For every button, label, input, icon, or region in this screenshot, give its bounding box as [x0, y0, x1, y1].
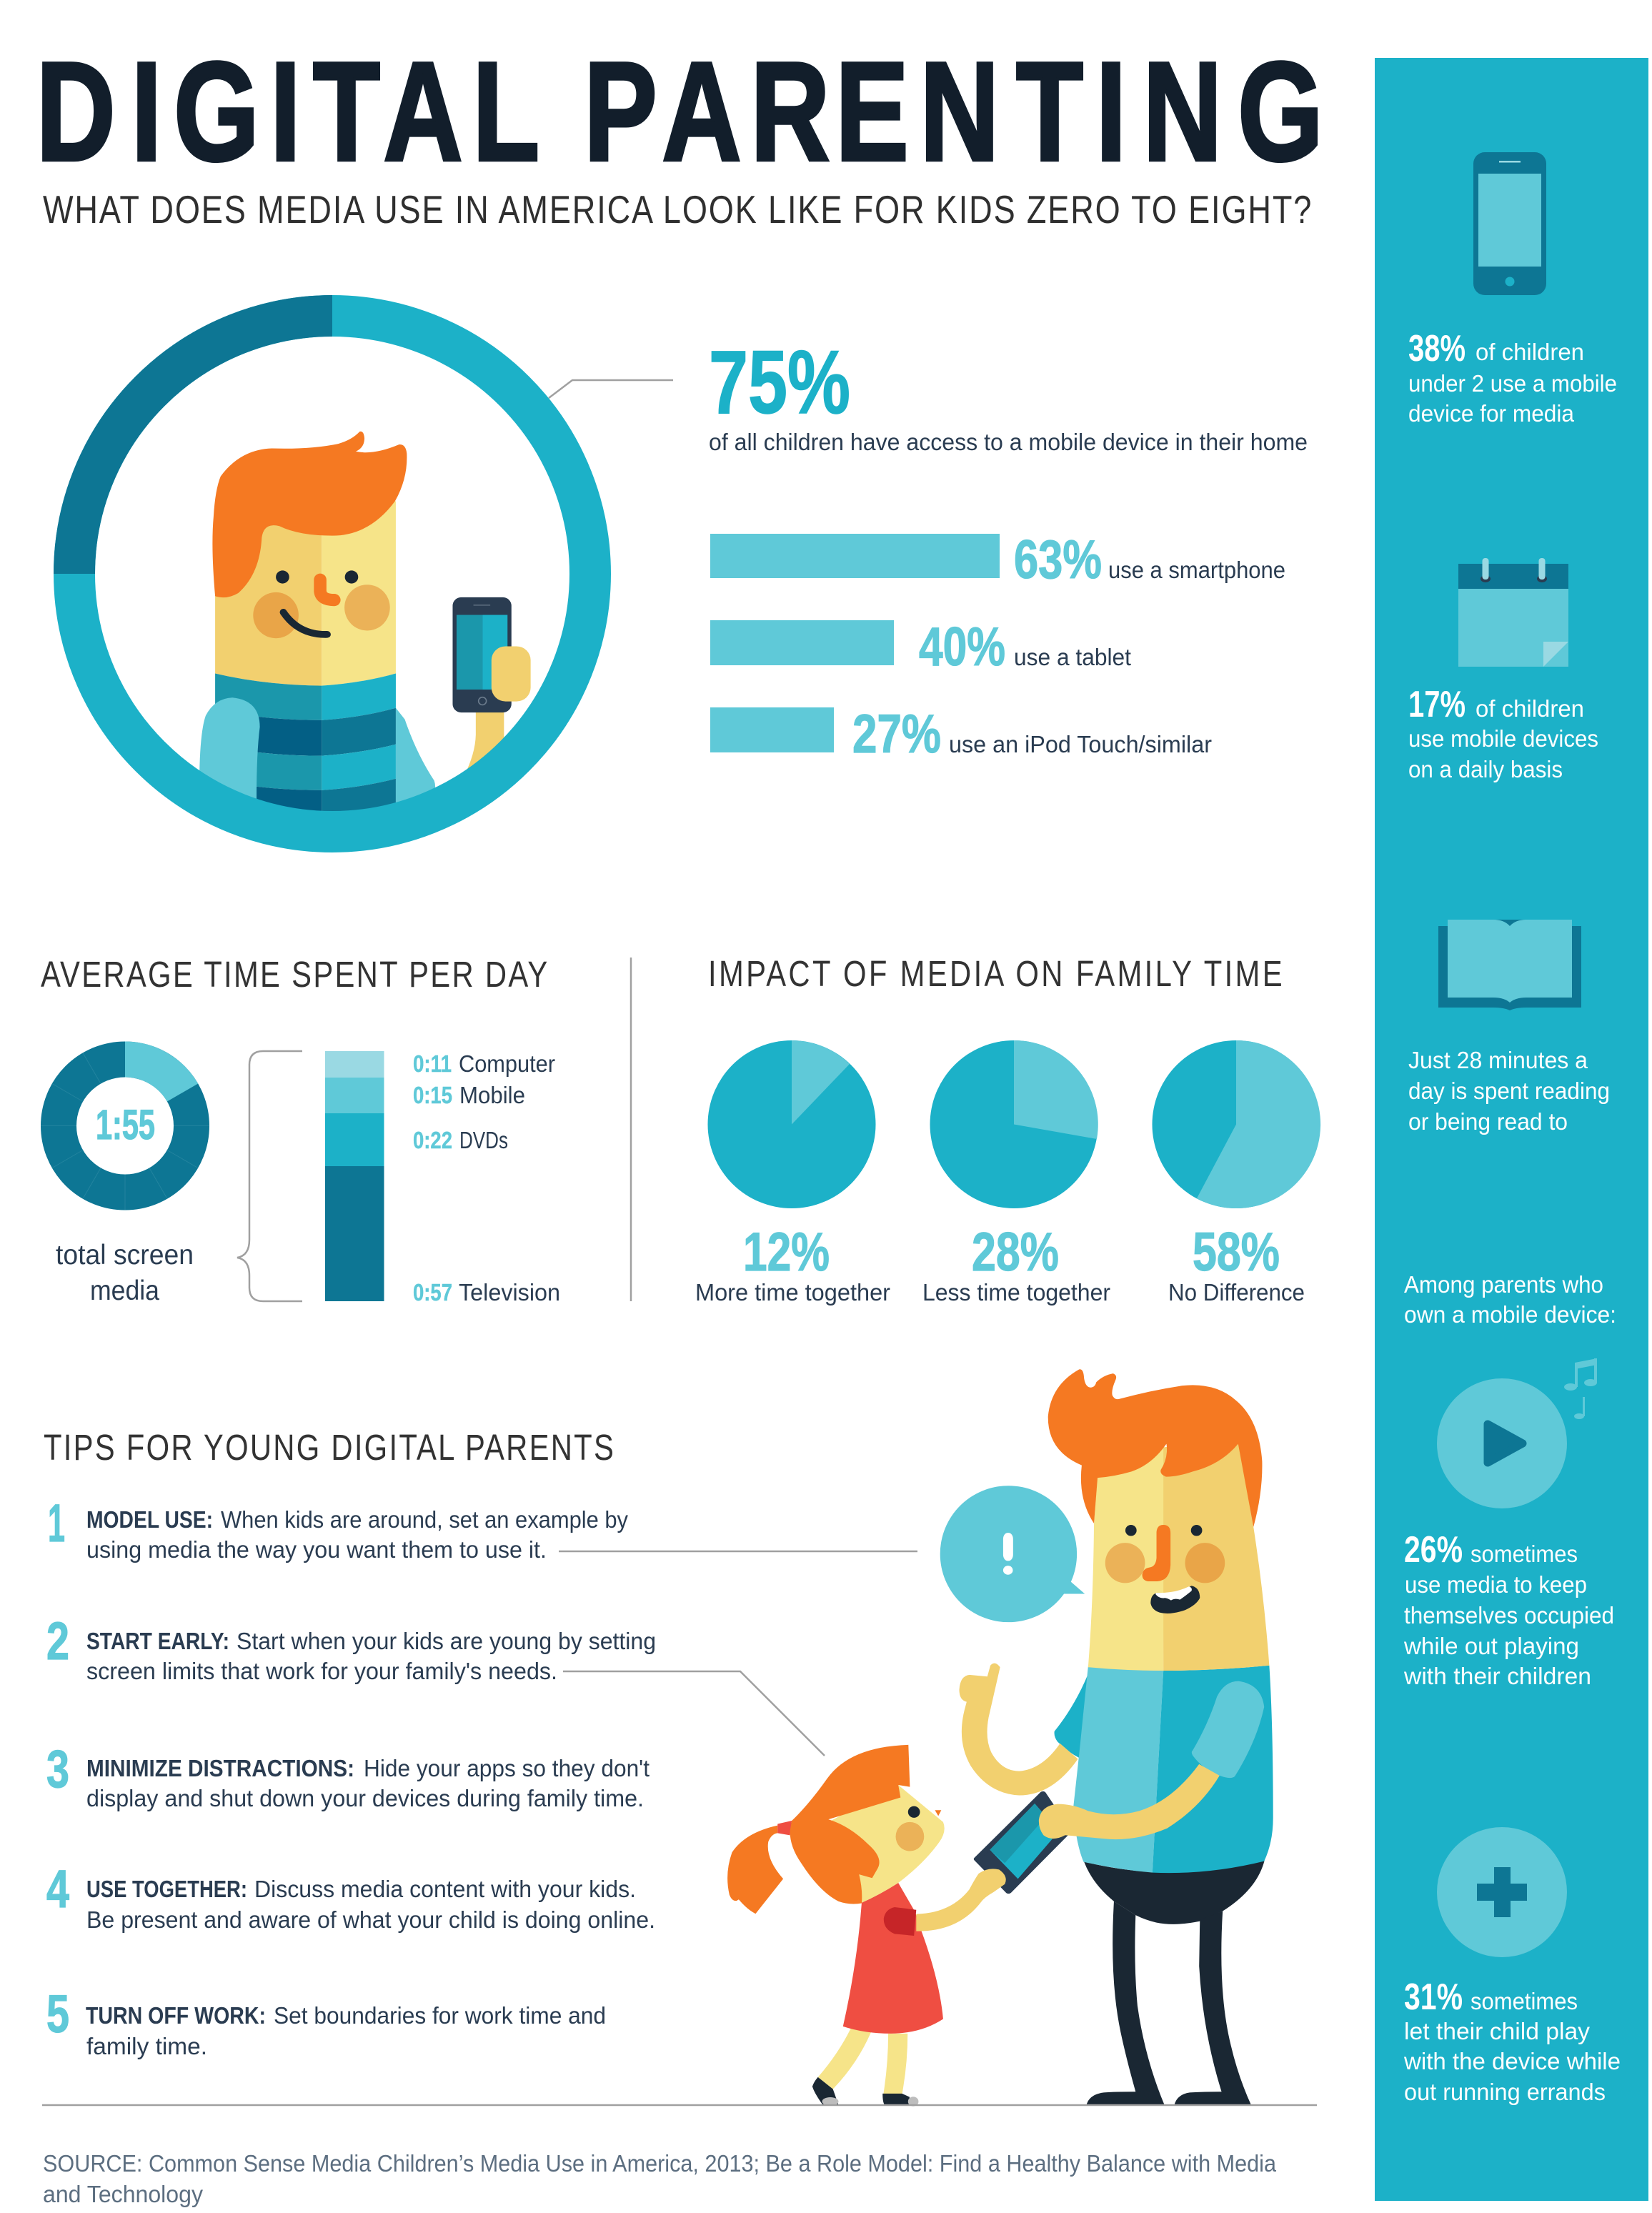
legend: mobile: Mobile: [459, 1082, 525, 1108]
panel: mobile access ring with boy: [74, 316, 673, 838]
source text: SOURCE: Common Sense Media Children’s Media Use in America, 2013; Be a Role Model: Find a Healthy Balance with Media: [43, 2150, 1277, 2177]
text: reading: day is spent reading: [1408, 1078, 1610, 1104]
ring chart: 75%: [74, 316, 590, 832]
pie chart: less time together: [922, 1040, 1110, 1306]
legend: DVDs: [413, 1127, 508, 1153]
stat: 26%: while out playing: [1403, 1633, 1579, 1659]
stat: 31%: out running errands: [1404, 2079, 1606, 2105]
tip 3: 3: [46, 1739, 69, 1799]
stat: 26%: themselves occupied: [1404, 1602, 1614, 1628]
bar: smartphone: 63%: [1014, 529, 1102, 590]
tip 4: Be present and aware of what your child is doing online.: [86, 1906, 655, 1933]
legend: computer: [413, 1050, 555, 1077]
tip 4: 4: [46, 1859, 69, 1919]
illustration: boy with phone: [199, 432, 531, 838]
stat: 38%: device for media: [1408, 400, 1575, 427]
pie chart: no difference: No Difference: [1168, 1279, 1305, 1306]
text: reading: Just 28 minutes a: [1408, 1047, 1588, 1073]
tip 2: screen limits that work for your family's needs.: [86, 1658, 557, 1684]
tip 5: Set boundaries for work time and: [274, 2002, 606, 2029]
stat: 38%: of children: [1476, 339, 1584, 365]
stat: 26%: 26%: [1404, 1529, 1463, 1571]
tip 3: [46, 1739, 650, 1811]
legend: computer: Computer: [459, 1050, 555, 1077]
heading: average time: AVERAGE TIME SPENT PER DAY: [41, 954, 547, 995]
stat: 17%: of children: [1476, 695, 1584, 722]
tip 4: [46, 1859, 655, 1933]
label: total screen media: [56, 1240, 194, 1306]
stat: 26%: use media to keep: [1405, 1571, 1587, 1598]
stat: 17%: use mobile devices: [1408, 725, 1598, 752]
brace: [237, 1051, 302, 1301]
text: access to mobile device: of all children have access to a mobile device in their home: [709, 429, 1308, 455]
tip 4: USE TOGETHER:: [86, 1876, 247, 1902]
bar: iPod Touch: [710, 704, 1212, 765]
illustration: speech bubble with exclamation: [940, 1486, 1085, 1622]
donut chart: total screen media: 1:55: [96, 1102, 155, 1148]
icon: play button with music notes: [1437, 1358, 1597, 1508]
tip 3: Hide your apps so they don't: [364, 1755, 650, 1781]
bar: tablet: use a tablet: [1014, 644, 1131, 670]
icon: book: [1438, 920, 1581, 1010]
tip 5: TURN OFF WORK:: [86, 2002, 266, 2029]
stat: 38%: under 2 use a mobile: [1408, 370, 1617, 397]
legend: computer: 0:11: [413, 1050, 452, 1077]
stat: 31%: 31%: [1404, 1976, 1463, 2018]
stat: 31%: [1403, 1976, 1621, 2105]
connector: tip 1 to speech bubble: [559, 1551, 917, 1552]
tip 5: family time.: [86, 2033, 207, 2059]
tip 1: using media the way you want them to use it.: [86, 1536, 547, 1563]
tip 1: When kids are around, set an example by: [221, 1506, 628, 1533]
legend: DVDs: DVDs: [459, 1127, 508, 1153]
tip 4: Discuss media content with your kids.: [254, 1876, 636, 1902]
tip 2: 2: [46, 1611, 69, 1671]
bar: tablet: [710, 617, 1131, 677]
text: reading: [1408, 1047, 1610, 1135]
tip 2: START EARLY:: [86, 1628, 229, 1654]
stat: 38%: 38%: [1408, 328, 1466, 369]
illustration: shared phone: [977, 1794, 1068, 1891]
pie chart: no difference: 58%: [1193, 1222, 1280, 1283]
heading: tips: TIPS FOR YOUNG DIGITAL PARENTS: [44, 1427, 614, 1468]
illustration: father arm holding phone: [1039, 1764, 1220, 1839]
connector line: [549, 380, 673, 398]
pie chart: less time together: 28%: [972, 1222, 1059, 1283]
bar: iPod Touch: 27%: [852, 704, 941, 765]
text: reading: or being read to: [1408, 1108, 1568, 1135]
stat: 38%: [1408, 328, 1617, 427]
text: among parents: own a mobile device:: [1404, 1301, 1616, 1328]
stacked bar: time by media: [325, 1051, 384, 1301]
heading: impact of media: IMPACT OF MEDIA ON FAMILY TIME: [708, 953, 1283, 994]
stat: 31%: let their child play: [1404, 2018, 1591, 2044]
stat: 26%: sometimes: [1471, 1541, 1578, 1567]
tip 5: [46, 1984, 606, 2059]
stat: 26%: [1403, 1529, 1614, 1689]
tip 2: Start when your kids are young by setting: [237, 1628, 656, 1654]
tip 2: [46, 1611, 656, 1684]
illustration: girl: [727, 1745, 1006, 2107]
pie chart: less time together: Less time together: [922, 1279, 1110, 1306]
title: DIGITAL PARENTING: [36, 34, 1323, 190]
pie chart: more time together: More time together: [695, 1279, 890, 1306]
illustration: father lower body: [1084, 1861, 1265, 2106]
stat: 31%: with the device while: [1403, 2048, 1621, 2074]
stat: 17%: [1408, 684, 1598, 782]
illustration: father upper body: [959, 1369, 1273, 1873]
tip 3: MINIMIZE DISTRACTIONS:: [86, 1755, 354, 1781]
tip 1: 1: [48, 1493, 65, 1553]
icon: plus in circle: [1437, 1827, 1567, 1957]
stat: 75%: 75%: [709, 333, 850, 432]
tip 3: display and shut down your devices during family time.: [86, 1785, 644, 1811]
connector: tip 2 to girl: [563, 1671, 825, 1756]
tip 1: [48, 1493, 628, 1563]
legend: mobile: [413, 1082, 525, 1108]
bar: smartphone: [710, 529, 1285, 590]
legend: television: 0:57: [413, 1279, 452, 1306]
source text: [43, 2150, 1277, 2207]
stat: 26%: with their children: [1403, 1663, 1591, 1689]
stat: 31%: sometimes: [1471, 1988, 1578, 2014]
icon: calendar: [1458, 558, 1568, 667]
tip 5: 5: [46, 1984, 69, 2044]
label: total screen media: media: [90, 1275, 159, 1306]
bar: iPod Touch: use an iPod Touch/similar: [949, 731, 1212, 757]
pie chart: more time together: 12%: [743, 1222, 830, 1283]
source text: and Technology: [43, 2181, 203, 2207]
legend: DVDs: 0:22: [413, 1127, 452, 1153]
text: among parents: [1404, 1271, 1616, 1328]
bar: smartphone: use a smartphone: [1108, 557, 1285, 583]
pie chart: no difference: [1152, 1040, 1320, 1306]
tip 1: MODEL USE:: [86, 1506, 213, 1533]
panel: sidebar: [1375, 58, 1648, 2201]
label: total screen media: total screen: [56, 1240, 194, 1270]
pie chart: more time together: [695, 1040, 890, 1306]
stat: 17%: on a daily basis: [1408, 756, 1563, 782]
bar: tablet: 40%: [919, 617, 1005, 677]
text: among parents: Among parents who: [1404, 1271, 1603, 1298]
icon: phone: [1473, 152, 1546, 295]
legend: television: [413, 1279, 560, 1306]
subtitle: WHAT DOES MEDIA USE IN AMERICA LOOK LIKE FOR KIDS ZERO TO EIGHT?: [43, 187, 1311, 232]
legend: television: Television: [459, 1279, 560, 1306]
bar chart: device use: [710, 529, 1285, 765]
donut chart: total screen media: [41, 1053, 209, 1210]
stat: 17%: 17%: [1408, 684, 1466, 725]
legend: mobile: 0:15: [413, 1082, 452, 1108]
